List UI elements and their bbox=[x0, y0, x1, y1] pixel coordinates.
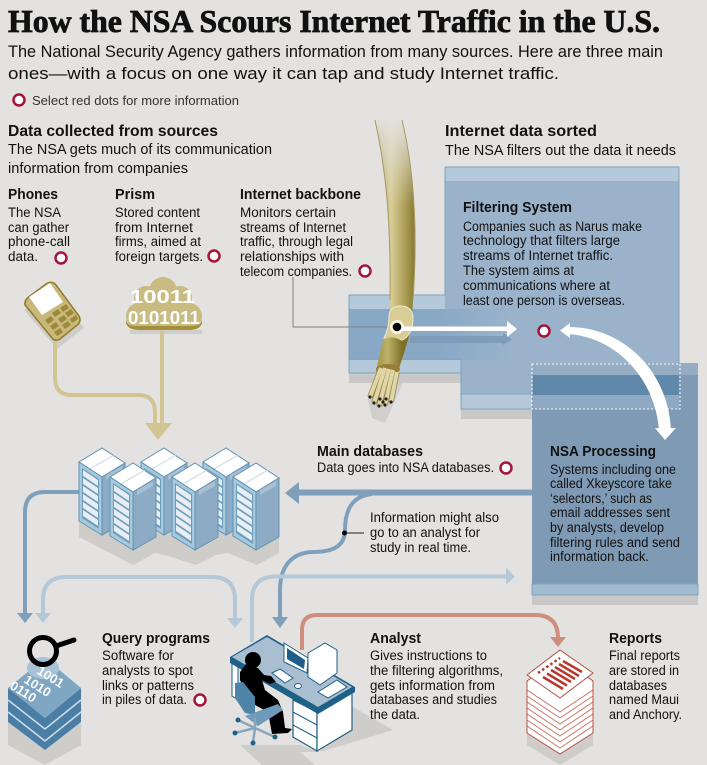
icon: query data stack bbox=[7, 638, 81, 765]
intro text: The National Security Agency gathers information from many sources. Here are three main bbox=[8, 42, 663, 61]
text block: filtering system: least one person is overseas. bbox=[463, 293, 625, 308]
text block: query programs: Software for bbox=[102, 648, 174, 663]
text block: internet backbone: Monitors certain bbox=[240, 205, 336, 220]
text block: nsa processing: filtering rules and send bbox=[550, 535, 680, 550]
text block: nsa processing: NSA Processing bbox=[550, 444, 656, 460]
arrow: query to analyst bbox=[35, 577, 243, 628]
leader line to cable bbox=[293, 277, 396, 327]
icon: query data stack: 1010 bbox=[21, 672, 54, 700]
text block: internet backbone bbox=[240, 187, 370, 279]
icon: query data stack: 1001 bbox=[34, 663, 67, 691]
text block: main databases: Main databases bbox=[317, 444, 423, 460]
legend: red dots hint: Select red dots for more information bbox=[32, 94, 239, 108]
arrow: databases to query bbox=[17, 492, 79, 623]
text block: nsa processing: by analysts, develop bbox=[550, 520, 664, 535]
text block: query programs: Query programs bbox=[102, 631, 210, 647]
text block: filtering system bbox=[463, 200, 642, 308]
text block: analyst: the data. bbox=[370, 707, 420, 722]
icon: database servers bbox=[79, 448, 279, 565]
arrow: cable to filter bbox=[397, 321, 517, 337]
icon: cloud: 0101011 bbox=[128, 307, 200, 328]
section heading: data collected: Data collected from sources bbox=[8, 123, 218, 140]
callout: real time bbox=[342, 510, 499, 555]
text block: analyst: Analyst bbox=[370, 631, 421, 647]
icon: cloud bbox=[126, 277, 202, 334]
section heading: internet data sorted: Internet data sorted bbox=[445, 123, 597, 140]
text block: reports bbox=[609, 631, 682, 722]
callout: real time: study in real time. bbox=[370, 540, 471, 555]
red dot: filtering bbox=[538, 326, 550, 336]
section heading: data collected: information from companies bbox=[8, 161, 188, 177]
text block: main databases: Data goes into NSA databases. bbox=[317, 460, 494, 475]
text block: internet backbone: relationships with bbox=[240, 249, 344, 264]
arrow: branch to analyst bbox=[272, 494, 372, 628]
panel: nsa processing bbox=[532, 363, 698, 605]
intro text: ones—with a focus on one way it can tap and study Internet traffic. bbox=[8, 64, 559, 83]
text block: analyst: databases and studies bbox=[370, 692, 497, 707]
text block: nsa processing bbox=[550, 444, 680, 564]
text block: internet backbone: traffic, through legal bbox=[240, 234, 353, 249]
icon: phone bbox=[24, 282, 84, 349]
panel: filtering system bbox=[349, 167, 679, 419]
title: How the NSA Scours Internet Traffic in the U.S. bbox=[8, 3, 660, 39]
callout: real time: go to an analyst for bbox=[370, 525, 480, 540]
callout: real time: Information might also bbox=[370, 510, 499, 525]
text block: query programs bbox=[102, 631, 210, 707]
text block: prism: Prism bbox=[115, 187, 155, 203]
text block: phones: can gather bbox=[8, 220, 69, 235]
text block: reports: named Maui bbox=[609, 692, 679, 707]
text block: reports: Final reports bbox=[609, 648, 680, 663]
arrow: analyst to processing bbox=[252, 568, 515, 642]
text block: nsa processing: Systems including one bbox=[550, 462, 676, 477]
section heading: internet data sorted bbox=[445, 123, 676, 159]
text block: query programs: in piles of data. bbox=[102, 692, 187, 707]
text block: reports: Reports bbox=[609, 631, 662, 647]
text block: internet backbone: telecom companies. bbox=[240, 264, 352, 279]
arrow: analyst to reports bbox=[302, 615, 566, 650]
arrow: cable to filter shadow bbox=[410, 333, 512, 345]
text block: internet backbone: Internet backbone bbox=[240, 187, 361, 203]
text block: query programs: analysts to spot bbox=[102, 663, 193, 678]
text block: query programs: links or patterns bbox=[102, 678, 194, 693]
text block: internet backbone: streams of Internet bbox=[240, 220, 346, 235]
text block: analyst: the filtering algorithms, bbox=[370, 663, 503, 678]
icon: cloud: 10011 bbox=[130, 286, 195, 307]
text block: phones: Phones bbox=[8, 187, 58, 203]
arrow: processing to databases bbox=[285, 482, 532, 504]
icon: query data stack: 0110 bbox=[7, 678, 39, 705]
text block: reports: databases bbox=[609, 678, 667, 693]
text block: filtering system: Filtering System bbox=[463, 200, 572, 216]
text block: filtering system: The system aims at bbox=[463, 263, 574, 278]
text block: nsa processing: called Xkeyscore take bbox=[550, 476, 672, 491]
icon: analyst at desk bbox=[230, 635, 393, 765]
section heading: internet data sorted: The NSA filters out the data it needs bbox=[445, 143, 676, 159]
text block: prism: from Internet bbox=[115, 220, 193, 235]
intro text bbox=[8, 42, 663, 83]
arrow: sources into databases bbox=[55, 331, 172, 440]
icon: report stack bbox=[527, 650, 593, 765]
arrow: filter and processing exchange bbox=[560, 323, 676, 440]
text block: analyst bbox=[370, 631, 503, 722]
text block: analyst: gets information from bbox=[370, 678, 495, 693]
text block: phones: phone-call bbox=[8, 234, 70, 249]
text block: reports: are stored in bbox=[609, 663, 679, 678]
section heading: data collected bbox=[8, 123, 272, 177]
text block: reports: and Anchory. bbox=[609, 707, 682, 722]
section heading: data collected: The NSA gets much of its communication bbox=[8, 142, 272, 158]
text block: prism: firms, aimed at bbox=[115, 234, 201, 249]
text block: main databases bbox=[317, 444, 512, 475]
text block: filtering system: communications where at bbox=[463, 278, 610, 293]
icon: fiber cable bbox=[368, 120, 415, 423]
text block: prism bbox=[115, 187, 220, 264]
text block: prism: Stored content bbox=[115, 205, 200, 220]
text block: analyst: Gives instructions to bbox=[370, 648, 487, 663]
text block: nsa processing: information back. bbox=[550, 549, 649, 564]
text block: filtering system: Companies such as Narus make bbox=[463, 219, 642, 234]
text block: filtering system: technology that filters large bbox=[463, 233, 620, 248]
text block: phones bbox=[8, 187, 70, 264]
text block: prism: foreign targets. bbox=[115, 249, 203, 264]
text block: filtering system: streams of Internet traffic. bbox=[463, 248, 613, 263]
text block: phones: data. bbox=[8, 249, 38, 264]
text block: nsa processing: email addresses sent bbox=[550, 505, 670, 520]
cable tap point bbox=[390, 320, 404, 334]
text block: nsa processing: ‘selectors,’ such as bbox=[550, 491, 652, 506]
text block: phones: The NSA bbox=[8, 205, 61, 220]
